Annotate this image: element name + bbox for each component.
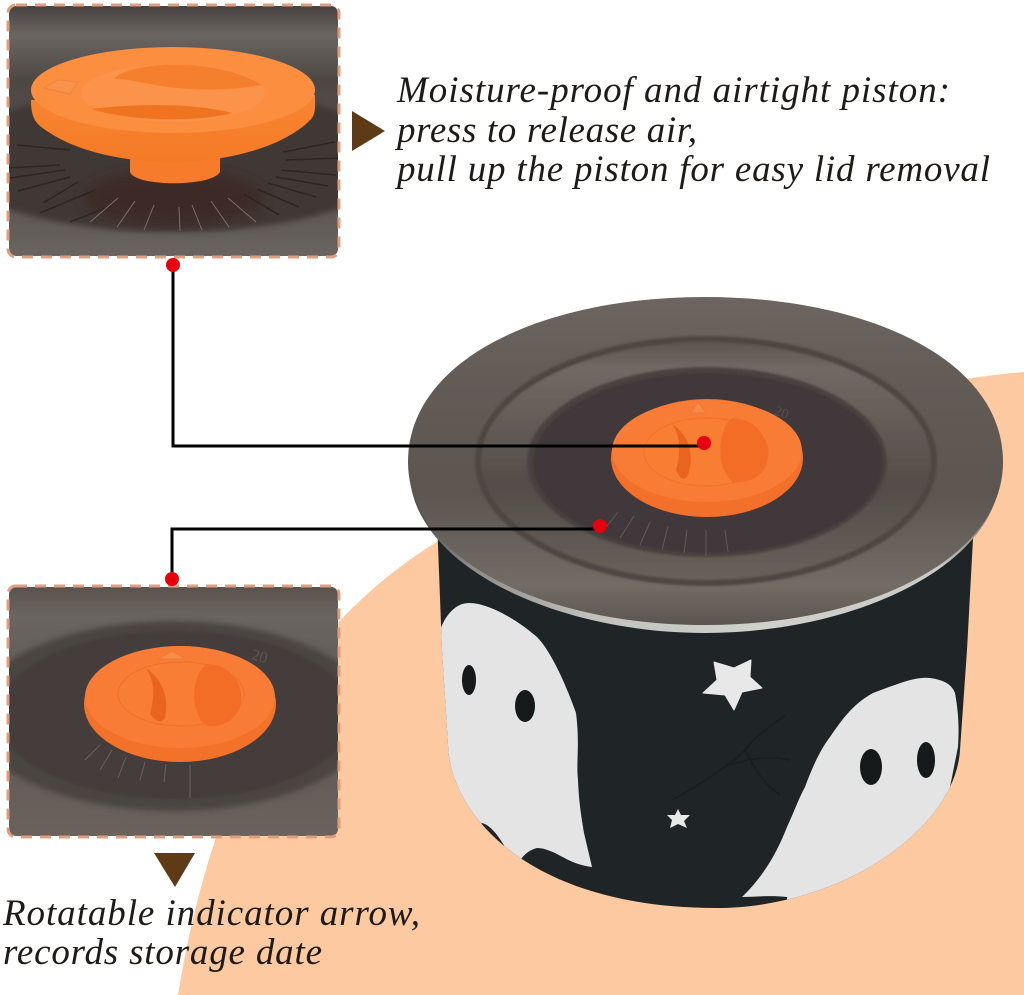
text: indicator description: [2, 893, 420, 973]
dial number: 20: [249, 647, 269, 667]
callout line: piston: [166, 258, 711, 450]
small star: [667, 809, 690, 828]
dashed border: [8, 5, 339, 257]
text: piston description: pull up the piston for easy lid removal: [394, 149, 990, 190]
faint tree branches: [672, 715, 790, 800]
knob side: [611, 399, 803, 517]
lid raised band: [478, 339, 934, 583]
lid outer: [408, 297, 1003, 625]
reddish shadow under knob: [83, 170, 263, 226]
background peach shape: [178, 372, 1024, 995]
knob finger holes: [672, 424, 691, 479]
knob recess: [118, 662, 244, 726]
dial ticks: [85, 745, 190, 798]
text: indicator description: records storage date: [3, 932, 322, 973]
text: indicator description: Rotatable indicator arrow,: [2, 893, 420, 934]
arrow: piston to text: [352, 111, 385, 151]
callout line: indicator: [165, 519, 607, 586]
radial ticks: [8, 142, 340, 222]
knob top: [31, 47, 315, 133]
knob top: [612, 400, 802, 502]
right ghost: [742, 678, 959, 910]
dial number: 20: [772, 404, 790, 423]
knob stem: [130, 158, 220, 184]
text: piston description: press to release air,: [394, 110, 697, 151]
orange piston knob: [611, 399, 803, 517]
text: piston description: Moisture-proof and airtight piston:: [396, 70, 950, 111]
knob indicator: [159, 651, 185, 659]
ghost eyes: [462, 665, 935, 785]
left ghost: [430, 603, 592, 867]
knob indicator: [44, 80, 78, 94]
canister body: [437, 520, 974, 908]
photo: storage canister: [408, 297, 1003, 910]
dashed border: [8, 586, 339, 837]
metal rim: [410, 460, 1000, 633]
piston photo: [9, 6, 338, 256]
photo lid well: [9, 104, 338, 234]
large star: [703, 660, 762, 710]
knob inner recess: [644, 418, 768, 486]
panel: piston close-up: [6, 4, 340, 258]
knob side: [84, 646, 276, 762]
knob indicator: [691, 402, 706, 413]
photo well: [18, 633, 332, 797]
recess shadow top: [115, 65, 262, 89]
finger hole right: [194, 664, 241, 726]
lid: [408, 297, 1003, 625]
ghost pattern: [430, 603, 959, 910]
knob side: [31, 95, 315, 162]
lid inner shadow: [527, 367, 887, 557]
dial ticks: [604, 512, 728, 556]
knob top: [85, 646, 275, 748]
knob recess: [81, 64, 265, 122]
text: piston description: [394, 70, 990, 190]
lid well: [533, 373, 883, 553]
indicator photo: [9, 587, 338, 836]
photo ring: [0, 621, 373, 811]
recess shadow bottom: [92, 105, 232, 119]
finger hole left: [146, 668, 166, 721]
arrow: indicator to text: [154, 853, 195, 887]
panel: indicator close-up: [0, 586, 373, 837]
